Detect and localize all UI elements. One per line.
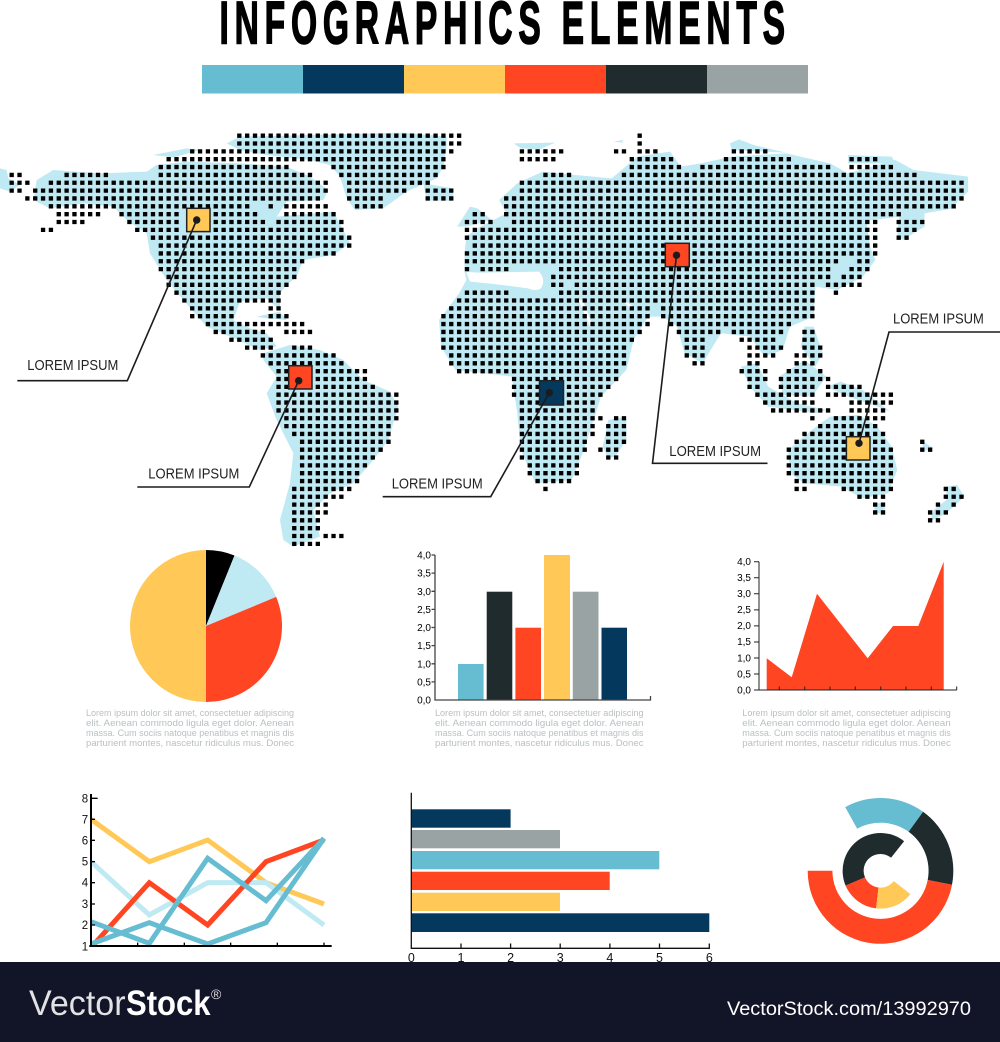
- bar chart: 0,5: [417, 677, 431, 688]
- horizontal bar chart: [408, 793, 713, 965]
- pie chart: [130, 550, 282, 702]
- bar chart: 0,0: [417, 696, 431, 706]
- line chart: 8: [82, 794, 88, 806]
- area chart: [737, 557, 957, 696]
- line chart: 7: [82, 814, 88, 826]
- text block: area chart caption: elit. Aenean commodo ligula eget dolor. Aenean: [742, 718, 951, 728]
- area chart: 1,0: [737, 654, 751, 664]
- text block: area chart caption: massa. Cum sociis natoque penatibus et magnis dis: [742, 728, 951, 738]
- footer image id: VectorStock.com/13992970: [727, 999, 971, 1020]
- area chart: 3,5: [737, 573, 751, 584]
- line chart: 1: [82, 942, 88, 954]
- footer logo: Stock: [126, 984, 211, 1023]
- horizontal bar chart: 6: [706, 951, 713, 965]
- footer band: [0, 962, 1000, 1042]
- bar chart: [417, 550, 650, 706]
- area chart: 4,0: [737, 557, 751, 568]
- horizontal bar chart: 4: [606, 951, 613, 965]
- text block: bar chart caption: elit. Aenean commodo ligula eget dolor. Aenean: [435, 718, 644, 728]
- callout: australia: [846, 310, 1000, 460]
- callout: north america: LOREM IPSUM: [27, 357, 118, 374]
- area chart: 3,0: [737, 589, 751, 600]
- bar chart: 2,0: [417, 623, 431, 634]
- bar chart: 1,5: [417, 641, 431, 652]
- bar chart: 3,0: [417, 587, 431, 598]
- text block: area chart caption: parturient montes, nascetur ridiculus mus. Donec: [742, 738, 951, 748]
- radial ring chart: [808, 798, 953, 944]
- land: eurasia, africa, oceania: [439, 139, 968, 522]
- dot grid: [10, 136, 964, 544]
- land: americas: [0, 133, 453, 547]
- area chart: 2,5: [737, 605, 751, 616]
- callout: north america: [17, 208, 210, 381]
- text block: pie caption: [86, 708, 294, 748]
- callout: asia: LOREM IPSUM: [669, 443, 761, 460]
- text block: pie caption: Lorem ipsum dolor sit amet, consectetuer adipiscing: [86, 708, 294, 718]
- text block: bar chart caption: parturient montes, nascetur ridiculus mus. Donec: [435, 738, 644, 748]
- line chart: 4: [82, 878, 89, 890]
- world map: [0, 133, 968, 547]
- text block: bar chart caption: massa. Cum sociis natoque penatibus et magnis dis: [435, 728, 644, 738]
- line chart: 3: [82, 899, 88, 911]
- horizontal bar chart: 1: [458, 951, 465, 965]
- text block: bar chart caption: [435, 708, 644, 748]
- bar chart: 3,5: [417, 569, 431, 580]
- callout: south america: LOREM IPSUM: [148, 465, 239, 482]
- footer logo: ®: [211, 986, 222, 1002]
- callout: australia: LOREM IPSUM: [893, 310, 984, 327]
- footer logo: [29, 984, 222, 1023]
- callout: africa: [383, 381, 564, 497]
- line chart: 6: [82, 836, 88, 848]
- text block: pie caption: elit. Aenean commodo ligula eget dolor. Aenean: [86, 718, 294, 728]
- callout: south america: [137, 366, 312, 487]
- line chart: [82, 794, 332, 954]
- text block: area chart caption: Lorem ipsum dolor sit amet, consectetuer adipiscing: [742, 708, 951, 718]
- footer logo: Vector: [29, 984, 126, 1023]
- bar chart: 2,5: [417, 605, 431, 616]
- text block: pie caption: parturient montes, nascetur ridiculus mus. Donec: [86, 738, 294, 748]
- text block: area chart caption: [742, 708, 951, 748]
- horizontal bar chart: 0: [408, 951, 415, 965]
- bar chart: 1,0: [417, 659, 431, 670]
- text block: bar chart caption: Lorem ipsum dolor sit amet, consectetuer adipiscing: [435, 708, 644, 718]
- area chart: 1,5: [737, 637, 751, 648]
- bar chart: 4,0: [417, 550, 431, 562]
- colour palette bar: [202, 65, 808, 94]
- horizontal bar chart: 5: [656, 951, 663, 965]
- text block: pie caption: massa. Cum sociis natoque penatibus et magnis dis: [86, 728, 294, 738]
- line chart: 2: [82, 920, 88, 932]
- area chart: 0,5: [737, 670, 751, 680]
- callout: africa: LOREM IPSUM: [392, 475, 483, 492]
- line chart: 5: [82, 856, 88, 868]
- area chart: 2,0: [737, 621, 751, 632]
- callout: asia: [652, 243, 768, 463]
- horizontal bar chart: 3: [557, 951, 564, 965]
- area chart: 0,0: [737, 686, 751, 696]
- horizontal bar chart: 2: [507, 951, 514, 965]
